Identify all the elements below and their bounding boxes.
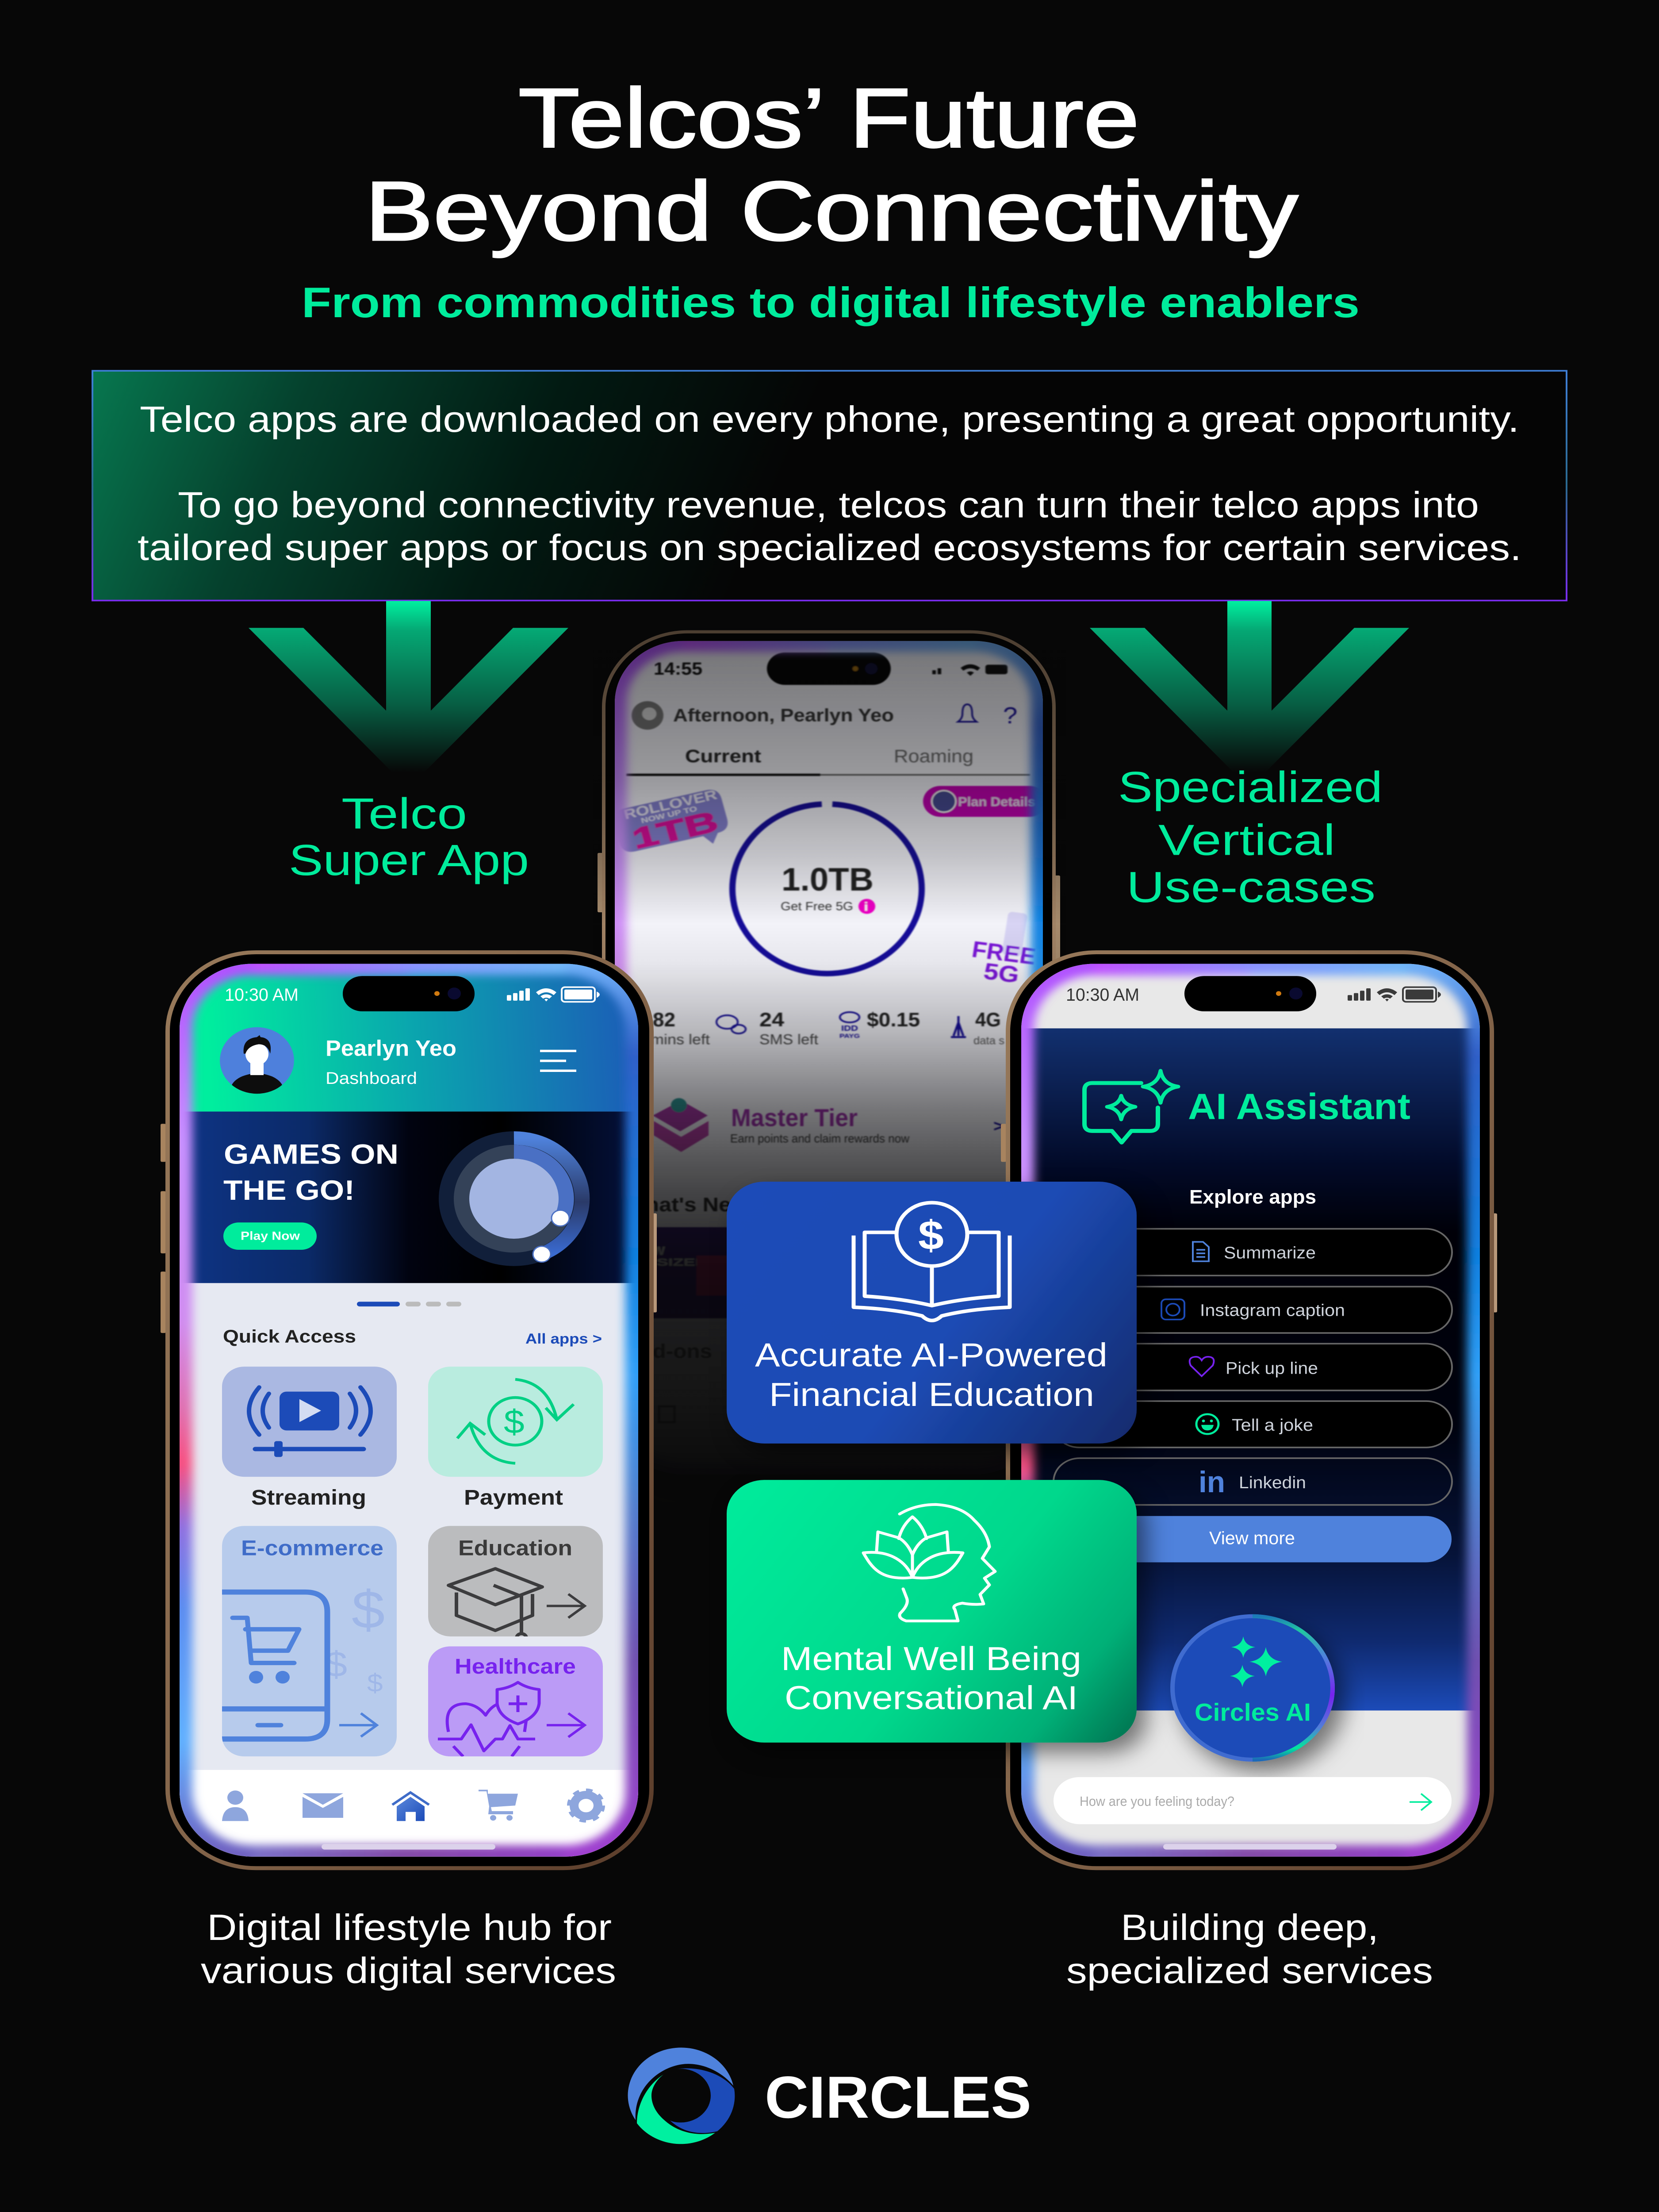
icon: sparkles [1230,1636,1282,1687]
icon: cart [479,1790,518,1820]
app pill: instagram [1054,1286,1452,1333]
intro text: Telco apps are downloaded on every phone, presenting a great opportunity. [140,399,1519,440]
card: e-commerce [212,1526,397,1756]
arrow [339,1713,377,1737]
icon: home [392,1793,429,1821]
rollover badge [610,786,733,864]
promo banner: UPSIZED [632,1257,708,1268]
status icons [932,664,1008,676]
usage ring [732,804,922,974]
donut graphic [439,1131,589,1266]
dollar signs [325,1580,385,1697]
right phone frame [1001,952,1497,1868]
bell and help icons [958,703,1017,728]
icon: profile [222,1790,249,1821]
icon: heart and shield [438,1682,539,1756]
right phone screen [1021,964,1480,1857]
dynamic island [1184,976,1316,1011]
navy panel [1021,1028,1480,1710]
center phone screen [610,641,1047,1475]
label: AI Assistant [1188,1086,1410,1127]
app pill: tell a joke [1054,1401,1452,1448]
quick access heading: Quick Access [223,1326,356,1347]
caption: building deep: specialized services [1066,1950,1433,1991]
card: financial education [727,1182,1137,1444]
label: Streaming [251,1485,366,1509]
arrow [547,1713,585,1737]
title: Telcos’ Future [518,71,1139,165]
quick access heading [223,1326,602,1347]
quick access heading: All apps > [525,1331,602,1347]
view more button: View more [1209,1528,1295,1548]
usage stats: 24 [759,1009,785,1031]
tabs: Roaming [894,746,973,766]
center phone [593,628,1066,1509]
user name: Dashboard [326,1069,417,1087]
arrow: left [249,601,568,788]
icon: streaming [249,1387,371,1457]
what's new: What's New [625,1194,748,1216]
arrow [547,1594,585,1618]
label: Education [458,1536,572,1560]
bell and help icons: ? [1003,703,1017,728]
left phone screen [180,964,638,1857]
dollar signs: $ [325,1645,347,1684]
heading: specialized vertical use-cases: Specialized [1118,763,1383,812]
arrow: right [1090,601,1409,788]
text: Mental Well Being [781,1640,1081,1677]
usage ring: i [864,900,868,914]
promo banner [615,1227,1043,1318]
circles AI button [1172,1616,1333,1759]
promo banner: NOW [632,1244,665,1258]
icon: head with lotus [863,1505,995,1621]
add-ons [624,1340,712,1422]
dollar signs: $ [352,1580,385,1640]
text [755,1336,1107,1413]
rollover badge: 1TB [629,805,721,855]
header [180,964,638,1112]
subtitle: From commodities to digital lifestyle enablers [302,278,1360,326]
app pill: summarize: Summarize [1224,1244,1316,1262]
card: payment [428,1367,603,1509]
explore apps label: Explore apps [1189,1186,1316,1208]
rim glow [180,964,638,1857]
card: healthcare [428,1646,603,1756]
usage stats [651,1009,1004,1048]
icon: settings gear [570,1791,602,1820]
panel: intro text box [92,371,1567,600]
banner heading: GAMES ON [224,1139,398,1170]
usage stats: 82 [653,1009,675,1031]
status icons [507,987,600,1002]
free 5G badge: FREE [970,936,1038,970]
usage stats: $0.15 [867,1009,920,1031]
title: Beyond Connectivity [365,164,1298,258]
usage ring: 1.0TB [782,862,874,898]
heading: telco super app: Super App [289,836,529,885]
usage stats: SMS left [759,1032,819,1048]
caption: digital lifestyle hub: various digital services [201,1950,616,1991]
dynamic island [343,976,475,1011]
play now button [223,1222,317,1250]
text [781,1640,1081,1717]
usage stats: 4G [975,1009,1001,1031]
user name: Pearlyn Yeo [326,1036,456,1061]
usage stats: data s [973,1034,1004,1047]
title [365,71,1298,258]
intro text [138,399,1521,568]
greeting: Afternoon, Pearlyn Yeo [673,705,894,726]
chat input: How are you feeling today? [1080,1794,1234,1809]
master tier row [653,1098,1004,1152]
center phone dim overlay [593,628,1066,1509]
usage ring: Get Free 5G [781,900,853,913]
app pill: linkedin: Linkedin [1239,1474,1306,1492]
app pill: summarize [1054,1229,1452,1275]
caption: digital lifestyle hub: Digital lifestyle hub for [207,1907,612,1948]
icon: payment: $ [504,1403,525,1440]
tabs [626,746,1030,776]
heading: specialized vertical use-cases [1118,763,1383,912]
app pill: linkedin: in [1199,1466,1225,1499]
clock: 10:30 AM [1066,985,1139,1004]
caption: digital lifestyle hub [201,1907,616,1991]
home indicator [322,1844,495,1850]
app pill: pick up line [1054,1344,1452,1390]
view more button [1054,1516,1452,1563]
usage stats: PAYG [839,1033,860,1039]
card: education [428,1526,603,1638]
dynamic island [767,653,891,685]
wordmark: CIRCLES [765,2064,1031,2131]
card: mental well being [727,1480,1137,1743]
games banner [180,1112,638,1283]
app pill: tell a joke: Tell a joke [1232,1416,1313,1435]
center phone frame [598,632,1060,1503]
rim glow [1021,964,1480,1857]
rollover badge: NOW UP TO [640,805,698,825]
label: Circles AI [1195,1699,1311,1726]
bottom navigation [180,1770,638,1857]
label: E-commerce [241,1536,383,1560]
icon: book with dollar: $ [918,1212,944,1258]
avatar [220,1027,294,1107]
icon: mail [303,1793,343,1818]
free 5G badge [967,908,1042,990]
rollover badge: ROLLOVER [622,787,719,822]
text: Accurate AI-Powered [755,1336,1107,1373]
app pill: linkedin [1054,1458,1452,1505]
usage stats: mins left [651,1032,710,1048]
AI assistant heading [1084,1071,1410,1142]
master tier row: Master Tier [731,1105,858,1132]
label: Payment [464,1485,563,1509]
plan details pill: Plan Details [958,795,1035,809]
add-ons: Add-ons [624,1340,712,1363]
icon: phone with cart [212,1592,327,1739]
right phone [1001,952,1497,1868]
heading: specialized vertical use-cases: Vertical [1158,816,1335,864]
master tier row: Earn points and claim rewards now [730,1132,909,1145]
heading: telco super app: Telco [341,790,467,838]
status icons [1348,987,1441,1002]
dollar signs: $ [367,1669,383,1697]
left phone frame [161,952,657,1868]
icon: book with dollar [854,1202,1010,1321]
status time: 14:55 [654,659,702,678]
icon: payment [457,1379,574,1463]
banner heading [223,1139,398,1206]
icon: graduation cap [448,1569,542,1638]
caption: building deep: Building deep, [1121,1907,1379,1948]
app pill: instagram: Instagram caption [1200,1302,1345,1320]
plan details pill [923,786,1047,817]
heading: telco super app [289,790,529,885]
intro text: To go beyond connectivity revenue, telcos can turn their telco apps into [178,484,1479,525]
card: streaming [222,1367,397,1509]
clock: 10:30 AM [225,985,299,1004]
left phone [161,952,657,1868]
menu icon [540,1050,576,1072]
icon: AI chat bubble [1084,1071,1178,1142]
logo mark [628,2047,735,2144]
logo: circles [628,2047,1031,2144]
free 5G badge: 5G [982,958,1021,988]
app pill: pick up line: Pick up line [1226,1359,1318,1378]
master tier row: > [993,1118,1004,1135]
greeting [632,701,894,730]
text: Financial Education [769,1376,1094,1413]
intro text: tailored super apps or focus on specialized ecosystems for certain services. [138,527,1521,568]
pager dots [357,1302,461,1306]
caption: building deep [1066,1907,1433,1991]
play now button: Play Now [241,1229,300,1243]
tabs: Current [685,746,761,766]
text: Conversational AI [785,1679,1078,1717]
user name [326,1036,456,1087]
label: Healthcare [455,1655,576,1678]
banner heading: THE GO! [223,1175,355,1206]
home indicator [1163,1844,1337,1850]
heading: specialized vertical use-cases: Use-cases [1126,863,1375,912]
rim glow [615,641,1043,1475]
usage stats: IDD [841,1024,858,1033]
chat input [1054,1777,1452,1824]
